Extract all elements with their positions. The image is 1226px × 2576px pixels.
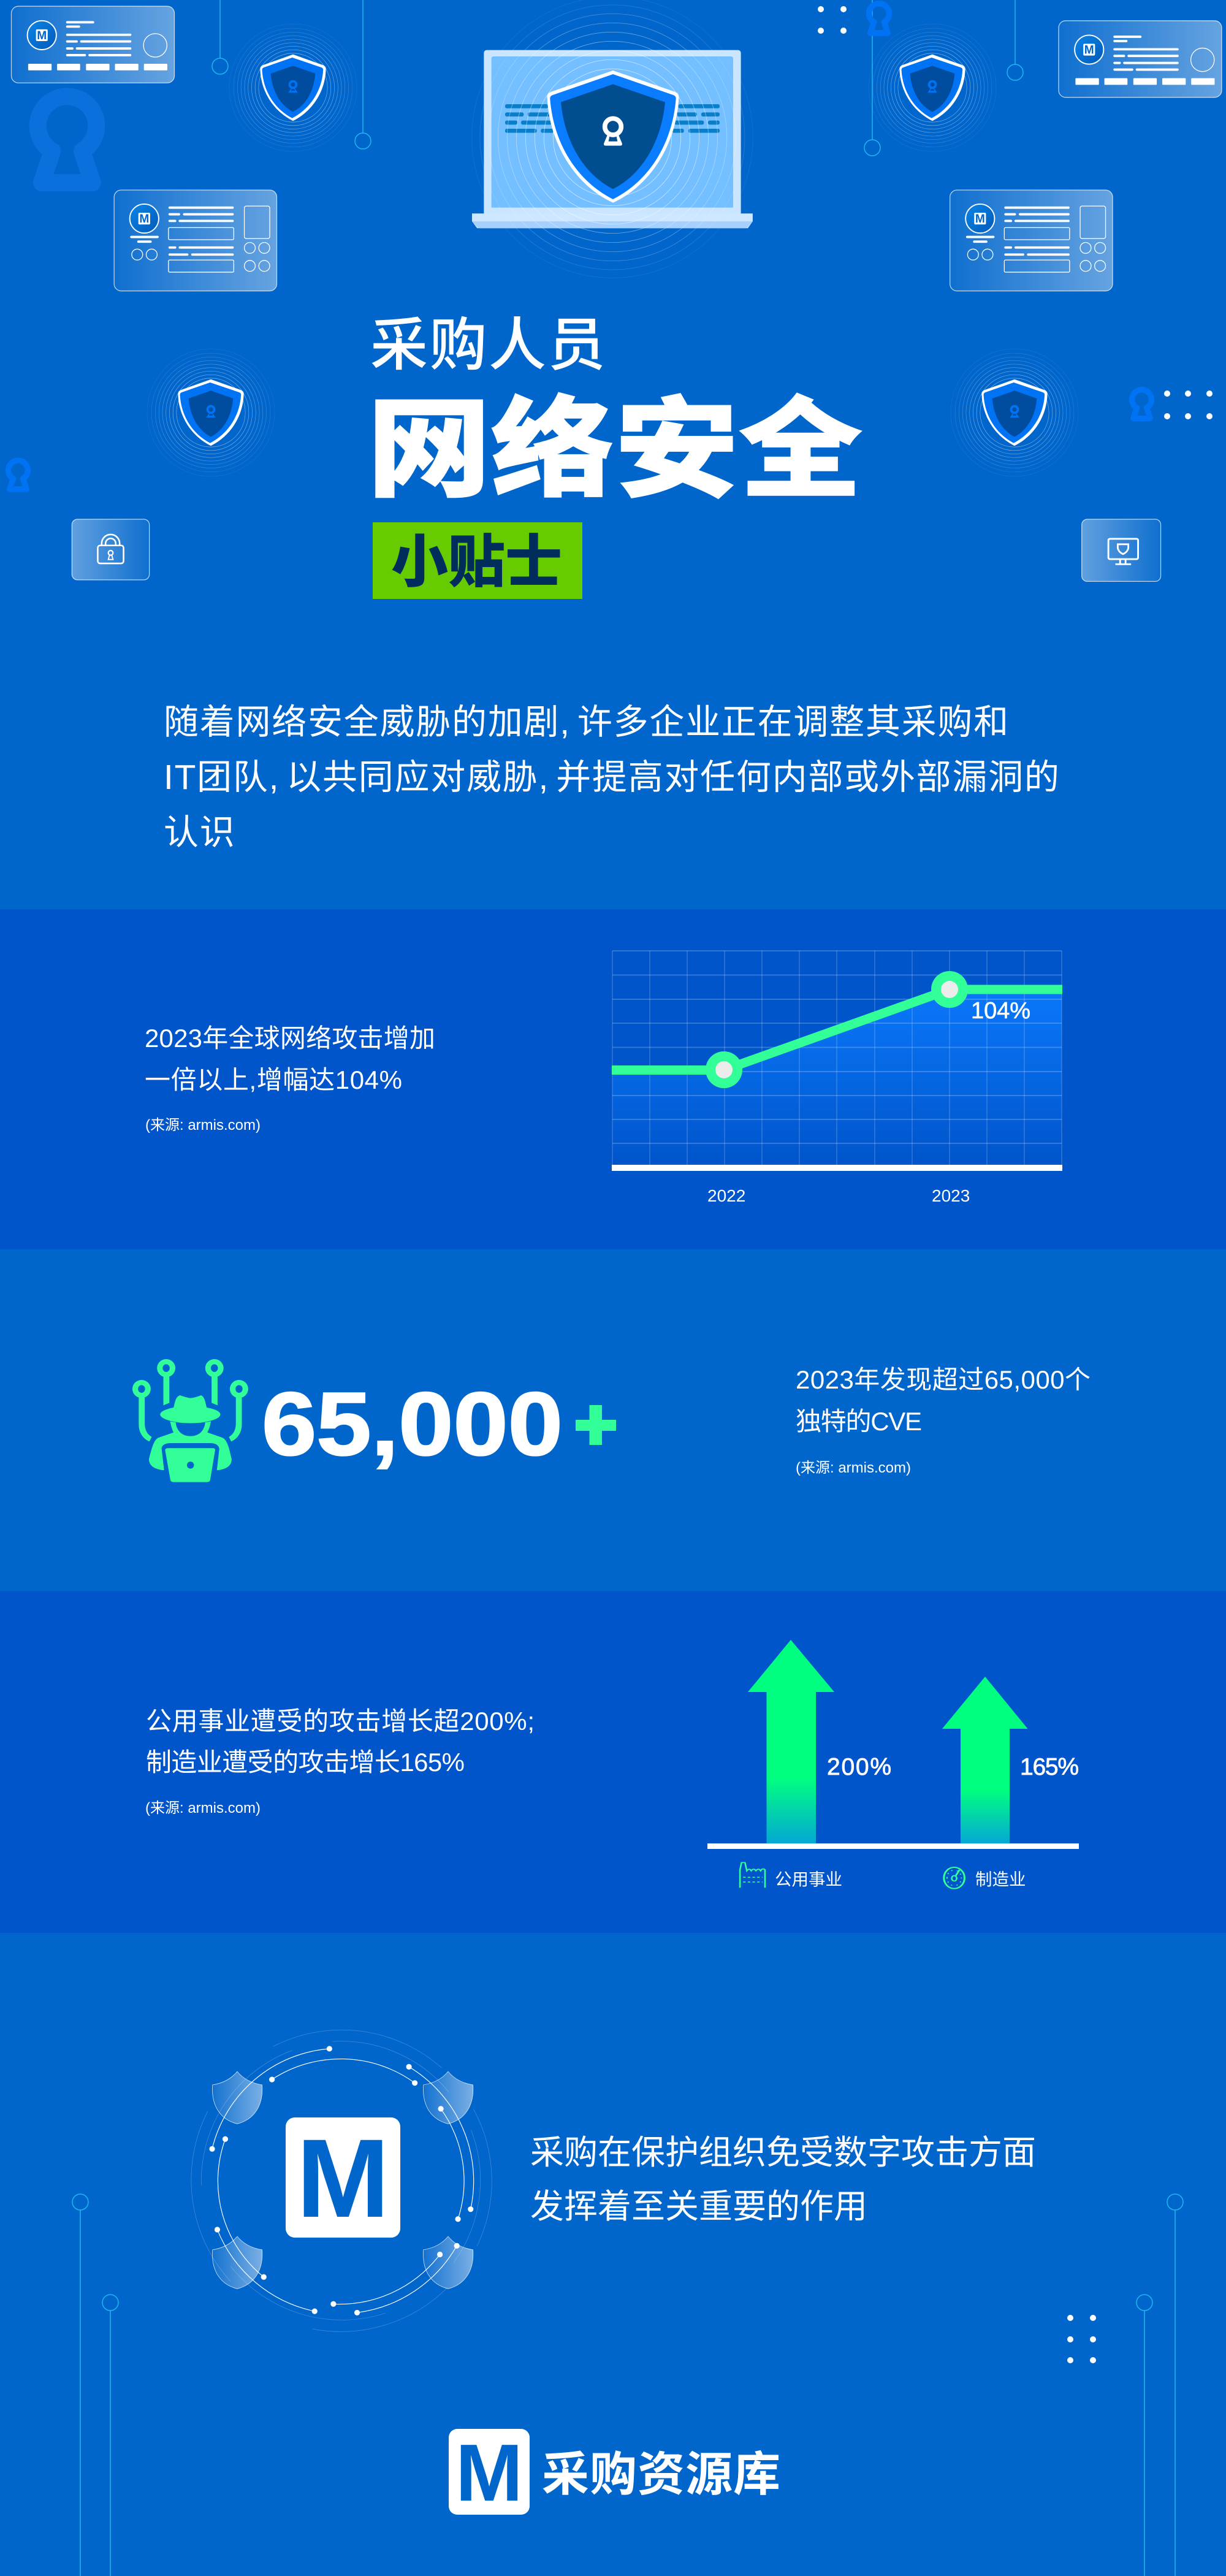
icon: gauge <box>944 1867 964 1889</box>
text: closing statement <box>530 2133 1036 2225</box>
laptop base <box>472 213 753 228</box>
icon: small keyhole left <box>9 460 28 489</box>
point 2022 <box>706 1051 742 1088</box>
arrow chart <box>707 1640 1079 1889</box>
text: attack growth <box>145 1024 435 1134</box>
illustration: M tile with shield ring <box>191 2030 492 2331</box>
icon: hacker <box>132 1359 248 1482</box>
area fill <box>612 989 1062 1165</box>
line chart <box>612 951 1062 1205</box>
value 165%: 165% <box>1020 1754 1079 1780</box>
band: attack growth section <box>0 909 1226 1249</box>
grid <box>612 951 1062 1165</box>
text: CVE: 2023年发现超过65,000个 <box>796 1365 1091 1394</box>
axis <box>612 1165 1062 1171</box>
icon: shield mid right <box>951 349 1078 476</box>
card: ID top right: M <box>1084 44 1094 56</box>
point 2023 <box>931 971 968 1008</box>
card: ID mid right: M <box>975 213 985 226</box>
M tile: M <box>297 2116 390 2241</box>
trend line <box>612 989 1062 1070</box>
text: sector growth: 公用事业遭受的攻击增长超200%; <box>146 1707 535 1736</box>
text: sector growth <box>145 1707 535 1816</box>
connector lines: top <box>212 0 1023 156</box>
x label 2023: 2023 <box>932 1186 970 1205</box>
text: attack growth: 一倍以上,增幅达104% <box>145 1065 402 1094</box>
laptop body <box>484 50 741 216</box>
value: 104% <box>971 998 1030 1024</box>
intro paragraph: 随着网络安全威胁的加剧,许多企业正在调整其采购和 <box>164 703 1010 742</box>
title tag: tips: 小贴士 <box>391 530 562 594</box>
text: attack growth: 2023年全球网络攻击增加 <box>145 1024 435 1053</box>
text: CVE <box>796 1365 1091 1476</box>
illustration: laptop with shield <box>472 0 753 278</box>
intro paragraph: IT团队,以共同应对威胁,并提高对任何内部或外部漏洞的 <box>164 758 1060 797</box>
band: sector growth section <box>0 1591 1226 1933</box>
icon: shield mid left <box>147 349 275 476</box>
title: subtitle: 采购人员 <box>370 313 607 377</box>
arrow: utilities <box>748 1640 834 1843</box>
laptop screen <box>492 56 733 208</box>
icon: keyhole right <box>1132 390 1151 418</box>
faint rings <box>191 2030 492 2331</box>
screen text lines <box>505 104 720 133</box>
icon: keyhole top right <box>869 4 889 33</box>
circuit arcs <box>212 2049 474 2312</box>
intro paragraph: 认识 <box>164 813 235 852</box>
connector lines: bottom <box>72 2194 1183 2576</box>
icon: large faint keyhole <box>38 96 96 183</box>
button: monitor <box>1082 519 1161 581</box>
stat: 65,000: 65,000 <box>262 1374 563 1474</box>
dots bottom <box>1067 2315 1096 2363</box>
card: ID mid right <box>950 190 1113 291</box>
dots right <box>1164 391 1213 419</box>
dots top <box>818 6 847 34</box>
card: ID mid left <box>114 190 277 291</box>
axis <box>707 1843 1079 1849</box>
card: ID top right <box>1059 21 1222 97</box>
label: manufacturing: 制造业 <box>975 1870 1026 1889</box>
text: CVE: 独特的CVE <box>796 1407 922 1436</box>
logo: wordmark: 采购资源库 <box>542 2448 781 2501</box>
title: main: 网络安全 <box>367 389 862 511</box>
icon: factory <box>740 1862 765 1888</box>
text: attack growth: (来源: armis.com) <box>145 1117 261 1134</box>
value 200%: 200% <box>827 1754 891 1780</box>
x label 2022: 2022 <box>707 1186 745 1205</box>
title tag: tips <box>373 522 582 599</box>
ripple rings <box>472 0 753 278</box>
text: closing statement: 采购在保护组织免受数字攻击方面 <box>530 2133 1036 2171</box>
intro paragraph <box>164 703 1060 852</box>
button: lock <box>72 519 150 580</box>
stat plus <box>576 1405 616 1445</box>
text: closing statement: 发挥着至关重要的作用 <box>530 2187 867 2225</box>
circuit nodes <box>209 2046 473 2315</box>
card: ID top left <box>11 6 174 83</box>
logo: M tile: M <box>455 2428 523 2518</box>
text: sector growth: 制造业遭受的攻击增长165% <box>146 1748 465 1777</box>
card: ID top left: M <box>37 29 47 42</box>
card: ID mid left: M <box>139 213 149 226</box>
icon: shield top right <box>869 24 996 151</box>
text: sector growth: (来源: armis.com) <box>145 1800 261 1816</box>
label: utilities: 公用事业 <box>775 1870 842 1889</box>
large shield <box>547 70 679 203</box>
arrow: manufacturing <box>942 1677 1027 1843</box>
glass shields <box>213 2071 473 2288</box>
icon: shield top left <box>229 24 357 151</box>
text: CVE: (来源: armis.com) <box>796 1460 911 1476</box>
